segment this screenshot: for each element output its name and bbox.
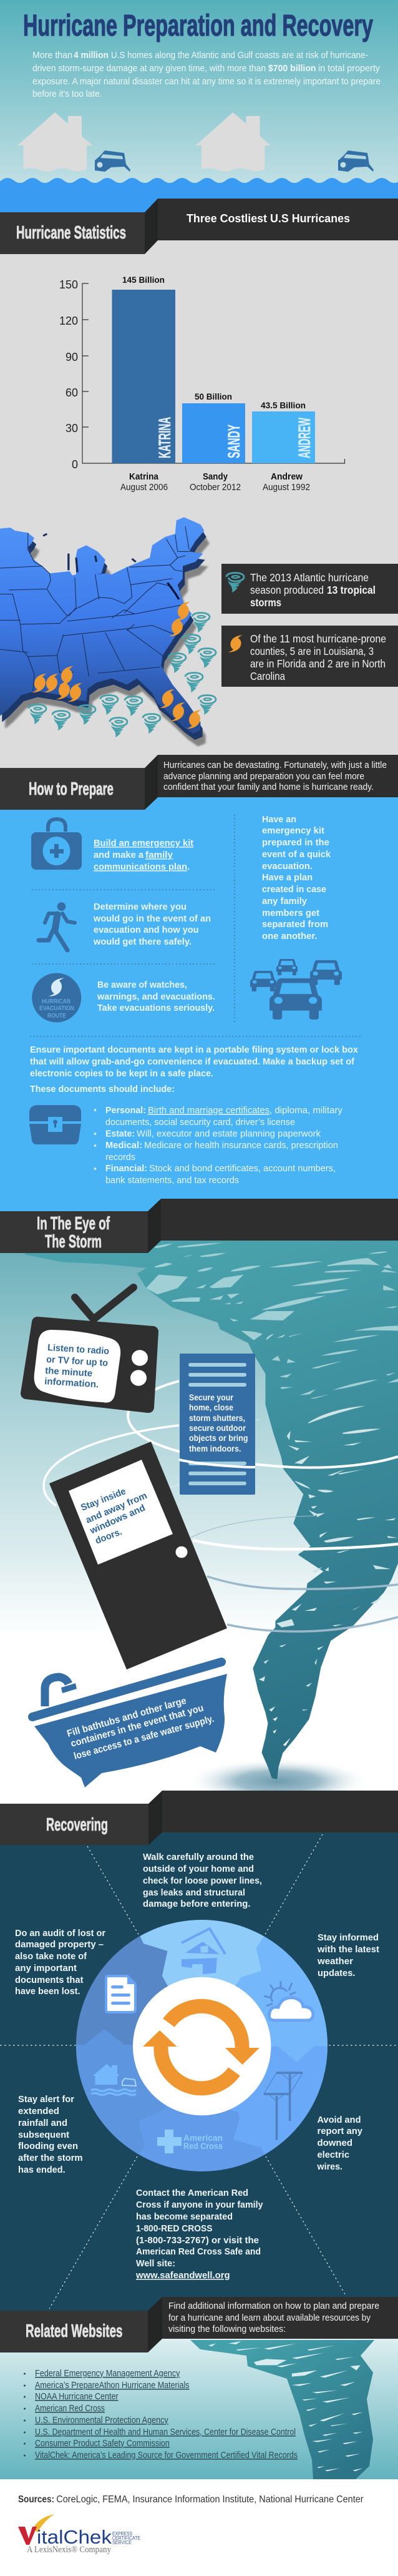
icon: first aid kit: [31, 819, 82, 870]
bar chart: KATRINA: [155, 417, 174, 458]
text: family plan column: members get: [262, 908, 319, 918]
text: audit property: Do an audit of lost or: [15, 1928, 105, 1939]
text: stay alert: extended: [18, 2106, 59, 2116]
intro text: driven storm-surge damage at any given time, with more than: [32, 64, 266, 74]
banner: recovering: [0, 1791, 398, 1845]
heading: hurricane statistics: Hurricane Statistics: [16, 223, 126, 243]
text: watches and warnings: Take evacuations seriously.: [97, 1003, 215, 1013]
panel: recovering background: [0, 1817, 398, 2323]
card: secure your home: objects or bring: [189, 1433, 248, 1443]
panel: statistics background: [0, 231, 398, 787]
list: documents to include: records: [105, 1152, 135, 1163]
wind rings: [44, 1381, 398, 1631]
logo: VitalChek: EXPRESS: [112, 2531, 132, 2537]
list: documents to include: bank statements, and tax records: [105, 1175, 239, 1186]
list: documents to include: Birth and marriage certificates: [148, 1105, 269, 1116]
bar chart: October 2012: [190, 483, 241, 493]
list: websites: U.S. Environmental Protection Agency: [35, 2415, 168, 2426]
illustration: bathtub: [32, 1662, 227, 1787]
text: audit property: documents that: [15, 1975, 84, 1985]
text: documents advice: that will allow grab-and-go convenience if evacuated. Make a backup set of: [30, 1056, 355, 1067]
card: secure your home: home, close: [189, 1402, 233, 1412]
callout: tropical storms: season produced: [250, 584, 324, 596]
TV screen: [34, 1330, 120, 1403]
icon: evacuation route sign: ROUTE: [47, 1013, 66, 1020]
heading: in the eye of the storm: The Storm: [45, 1232, 102, 1252]
heading: how to prepare: How to Prepare: [29, 779, 114, 799]
intro text: before it’s too late.: [32, 89, 102, 99]
list: websites: Federal Emergency Management Agency: [35, 2368, 180, 2379]
list: websites: U.S. Department of Health and Human Services, Center for Disease Control: [35, 2427, 296, 2437]
intro text: $700 billion: [268, 64, 316, 74]
banner: in the eye of the storm: [0, 1199, 398, 1253]
text: evacuation: Determine where you: [94, 902, 187, 912]
icon: running person: [39, 902, 75, 950]
text: stay informed: with the latest: [317, 1944, 379, 1955]
icon: evacuation route sign: EVACUATION: [39, 1005, 74, 1012]
text: stay alert: rainfall and: [18, 2118, 67, 2128]
intro text: More than: [32, 51, 72, 61]
text: family plan column: one another.: [262, 931, 317, 941]
bar chart: 43.5 Billion: [261, 400, 306, 410]
bar chart: [59, 275, 344, 493]
text: banner intro: advance planning and preparation you can feel more: [163, 771, 364, 782]
text: fill bathtubs: Fill bathtubs and other large: [66, 1695, 188, 1739]
text: audit property: have been lost.: [15, 1986, 80, 1997]
text: stay inside: and away from: [84, 1490, 148, 1526]
icon: traffic of cars: [250, 959, 342, 1020]
icon: american red cross: [157, 2130, 223, 2153]
heading: recovering: Recovering: [46, 1815, 108, 1835]
text: audit property: also take note of: [15, 1951, 87, 1962]
text: contact red cross: Well site:: [136, 2258, 175, 2269]
list: websites: American Red Cross: [35, 2403, 105, 2414]
panel: eye of the storm background: [0, 1224, 398, 1817]
callout: tropical storms: 13 tropical: [327, 584, 376, 596]
text: walk around home: Walk carefully around the: [143, 1852, 254, 1862]
icon: american red cross: American: [183, 2133, 223, 2143]
text: avoid wires: electric: [317, 2150, 349, 2160]
panel: how to prepare background: [0, 787, 398, 1224]
bar chart: ANDREW: [295, 418, 314, 458]
text: watches and warnings: warnings, and evacuations.: [97, 991, 215, 1002]
text: emergency kit: and make a: [94, 850, 144, 860]
map: eastern United States: [0, 517, 210, 747]
icon: hurricane legend: [228, 636, 242, 652]
bar chart: August 1992: [263, 483, 310, 493]
text: stay informed: updates.: [318, 1968, 356, 1979]
text: family plan column: separated from: [262, 919, 328, 930]
map markers: tornado icons: [29, 613, 216, 737]
intro text: [32, 51, 381, 99]
text: emergency kit: family: [145, 850, 173, 860]
list: documents to include: , diploma, military: [269, 1105, 342, 1116]
header background: [0, 0, 398, 199]
callout: hurricane-prone counties: Carolina: [250, 670, 285, 682]
icon: lock box: [29, 1105, 81, 1144]
bar chart: 0: [72, 458, 78, 471]
banner: hurricane statistics: [0, 199, 398, 254]
logo: VitalChek: [18, 2514, 140, 2555]
text: stay inside: Stay inside: [79, 1486, 127, 1513]
text: walk around home: damage before entering.: [143, 1899, 251, 1909]
list: websites: Consumer Product Safety Commission: [35, 2438, 170, 2449]
callout: hurricane-prone counties: Of the 11 most hurricane-prone: [250, 632, 386, 645]
text: contact red cross: www.safeandwell.org: [135, 2270, 230, 2281]
bar chart: 60: [66, 386, 78, 399]
bar chart: 30: [66, 422, 78, 435]
text: documents advice: These documents should include:: [30, 1084, 175, 1094]
list: documents to include: Medical:: [105, 1140, 142, 1151]
text: contact red cross: [135, 2188, 263, 2281]
bar chart: 90: [66, 351, 78, 363]
bar chart: Katrina: [129, 471, 159, 482]
text: avoid wires: Avoid and: [317, 2115, 361, 2125]
text: sources: Sources:: [18, 2494, 54, 2505]
illustration: small tornado: [190, 2340, 374, 2479]
text: listen to radio: the minute: [45, 1365, 93, 1379]
intro text: exposure. A major natural disaster can hit at any time so it is extremely important to prepare: [32, 77, 381, 87]
logo: VitalChek: italChek: [37, 2526, 112, 2548]
text: banner intro: Find additional information on how to plan and prepare: [168, 2301, 379, 2311]
text: family plan column: event of a quick: [262, 849, 331, 860]
icon: flooded house small: [91, 2064, 136, 2095]
list: documents to include: Estate:: [105, 1129, 135, 1139]
illustration: door: [49, 1442, 227, 1669]
icon: document: [106, 1976, 135, 2012]
map markers: hurricane icons: [32, 602, 201, 729]
text: family plan column: prepared in the: [262, 837, 329, 848]
text: audit property: any important: [15, 1963, 77, 1974]
text: stay informed: Stay informed: [318, 1932, 379, 1943]
text: evacuation: would get there safely.: [93, 937, 192, 947]
text: watches and warnings: Be aware of watches,: [97, 980, 187, 990]
text: fill bathtubs: containers in the event that you: [70, 1703, 205, 1749]
text: avoid wires: wires.: [317, 2161, 342, 2172]
text: audit property: damaged property –: [15, 1939, 104, 1950]
text: stay alert: [18, 2094, 83, 2175]
text: stay alert: after the storm: [18, 2153, 83, 2163]
text: banner intro: [168, 2301, 379, 2334]
text: walk around home: gas leaks and structural: [143, 1887, 245, 1898]
logo: VitalChek: SERVICE: [112, 2540, 132, 2545]
callout: hurricane-prone counties: counties, 5 are in Louisiana, 3: [250, 645, 374, 657]
text: contact red cross: American Red Cross Safe and: [136, 2246, 261, 2257]
text: evacuation: would go in the event of an: [93, 913, 211, 924]
text: family plan column: emergency kit: [262, 825, 324, 836]
card: secure your home: [179, 1354, 255, 1495]
card: secure your home: them indoors.: [189, 1443, 241, 1453]
list: websites: NOAA Hurricane Center: [35, 2391, 119, 2402]
text: family plan column: Have an: [262, 814, 296, 825]
diagram: recovery wheel: [75, 1910, 331, 2174]
text: family plan column: created in case: [262, 884, 326, 895]
text: stay alert: subsequent: [18, 2130, 69, 2140]
flood water: [0, 178, 398, 231]
text: emergency kit: .: [187, 862, 190, 872]
illustration: large tornado: [26, 1239, 398, 1804]
text: banner intro: [163, 760, 387, 792]
text: contact red cross: (1-800-733-2767) or visit the: [136, 2235, 259, 2246]
callout: tropical storms: storms: [250, 596, 281, 609]
heading: three costliest: Three Costliest U.S Hurricanes: [187, 212, 350, 225]
icon: car 1: [95, 150, 130, 172]
text: listen to radio: or TV for up to: [46, 1354, 109, 1369]
text: banner intro: confident that your family and home is hurricane ready.: [163, 782, 374, 792]
text: listen to radio: [44, 1342, 110, 1390]
icon: sun and cloud: [264, 1981, 313, 2020]
banner: how to prepare: [0, 755, 398, 810]
illustration: TV: [26, 1287, 153, 1407]
bar chart: 145 Billion: [122, 275, 165, 285]
bar chart: 120: [59, 315, 78, 327]
callout: tropical storms: [221, 564, 398, 614]
list: websites: America’s PrepareAthon Hurricane Materials: [35, 2380, 190, 2391]
text: fill bathtubs: lose access to a safe water supply.: [73, 1714, 215, 1762]
list: documents to include: Will, executor and estate planning paperwork: [137, 1129, 321, 1139]
text: emergency kit: communications plan: [94, 862, 187, 872]
bar chart: 150: [59, 278, 78, 291]
text: stay inside: doors.: [94, 1526, 124, 1546]
text: family plan column: any family: [262, 896, 308, 907]
text: family plan column: [262, 814, 331, 941]
heading: in the eye of the storm: In The Eye of: [37, 1214, 110, 1234]
intro text: in total property: [318, 64, 381, 74]
icon: power poles: [264, 2073, 303, 2140]
text: audit property: [15, 1928, 105, 1997]
bar chart: Andrew: [271, 471, 303, 482]
text: emergency kit: [94, 838, 193, 872]
text: walk around home: [143, 1852, 262, 1909]
list: websites: [24, 2368, 298, 2460]
bar chart: Sandy: [203, 471, 228, 482]
card: secure your home: Secure your: [189, 1392, 233, 1402]
bar: sandy: [182, 403, 245, 463]
text: contact red cross: 1-800-RED CROSS: [136, 2223, 212, 2234]
text: banner intro: for a hurricane and learn about available resources by: [168, 2313, 371, 2323]
icon: flooded house 2: [196, 112, 271, 171]
list: documents to include: Stock and bond certificates, account numbers,: [149, 1163, 336, 1174]
icon: evacuation route sign: HURRICAN: [42, 998, 70, 1005]
text: emergency kit: Build an emergency kit: [94, 838, 193, 848]
list: documents to include: Medicare or health insurance cards, prescription: [144, 1140, 338, 1151]
text: stay alert: Stay alert for: [18, 2094, 74, 2105]
bar chart: August 2006: [120, 483, 168, 493]
text: evacuation: [93, 902, 211, 947]
text: stay alert: has ended.: [18, 2165, 66, 2175]
text: sources: CoreLogic, FEMA, Insurance Information Institute, National Hurricane Center: [56, 2494, 364, 2505]
text: stay inside: [79, 1486, 148, 1546]
list: documents to include: [94, 1105, 342, 1186]
text: documents advice: [30, 1045, 359, 1094]
card: secure your home: secure outdoor: [189, 1423, 246, 1433]
text: walk around home: check for loose power lines,: [143, 1875, 262, 1886]
text: stay inside: windows and: [88, 1502, 147, 1536]
intro text: 4 million: [74, 51, 109, 61]
list: websites: VitalChek: America’s Leading Source for Government Certified Vital Records: [35, 2450, 298, 2460]
list: documents to include: documents, social security card, driver’s license: [105, 1117, 295, 1128]
intro text: U.S homes along the Atlantic and Gulf coasts are at risk of hurricane-: [111, 51, 368, 61]
heading: related websites: Related Websites: [26, 2321, 122, 2341]
bar: katrina: [112, 290, 175, 463]
panel: related websites background: [0, 2323, 398, 2479]
text: evacuation: evacuation and how you: [94, 925, 198, 935]
icon: damaged house: [182, 1929, 225, 1974]
text: contact red cross: Cross if anyone in your family: [136, 2200, 263, 2210]
text: family plan column: evacuation.: [262, 861, 313, 872]
text: documents advice: electronic copies to be kept in a safe place.: [30, 1068, 213, 1079]
icon: car 2: [338, 150, 374, 172]
text: avoid wires: [317, 2115, 363, 2172]
callout: hurricane-prone counties: [221, 626, 398, 687]
text: watches and warnings: [97, 980, 215, 1013]
text: avoid wires: downed: [317, 2138, 352, 2148]
icon: orange cycle arrows: [143, 2006, 260, 2088]
list: documents to include: Financial:: [105, 1163, 147, 1174]
banner: related websites: [0, 2297, 398, 2352]
card: secure your home: storm shutters,: [189, 1413, 245, 1423]
icon: tornado legend: [226, 573, 244, 592]
text: contact red cross: has become separated: [136, 2211, 233, 2222]
text: avoid wires: report any: [317, 2126, 363, 2136]
heading: in the eye of the storm: [37, 1214, 110, 1252]
text: stay alert: flooding even: [18, 2141, 78, 2151]
bar chart: 50 Billion: [195, 391, 232, 401]
icon: evacuation route sign: [32, 973, 81, 1023]
text: listen to radio: Listen to radio: [47, 1342, 110, 1357]
text: walk around home: outside of your home and: [143, 1864, 254, 1874]
text: contact red cross: Contact the American Red: [136, 2188, 248, 2198]
text: banner intro: visiting the following websites:: [168, 2324, 286, 2334]
icon: flooded house 1: [17, 112, 92, 171]
list: documents to include: Personal:: [105, 1105, 146, 1116]
text: stay informed: [317, 1932, 379, 1979]
bar chart: SANDY: [225, 425, 243, 458]
callout: tropical storms: The 2013 Atlantic hurricane: [250, 571, 369, 584]
icon: american red cross: Red Cross: [183, 2141, 223, 2151]
text: family plan column: Have a plan: [262, 872, 313, 883]
text: stay informed: weather: [317, 1956, 353, 1967]
logo: VitalChek: CERTIFICATE: [112, 2535, 140, 2541]
bar: andrew: [252, 411, 315, 463]
text: documents advice: Ensure important documents are kept in a portable filing system or lock box: [30, 1045, 359, 1055]
logo: VitalChek: A LexisNexis® Company: [27, 2545, 111, 2555]
text: listen to radio: information.: [44, 1376, 99, 1390]
